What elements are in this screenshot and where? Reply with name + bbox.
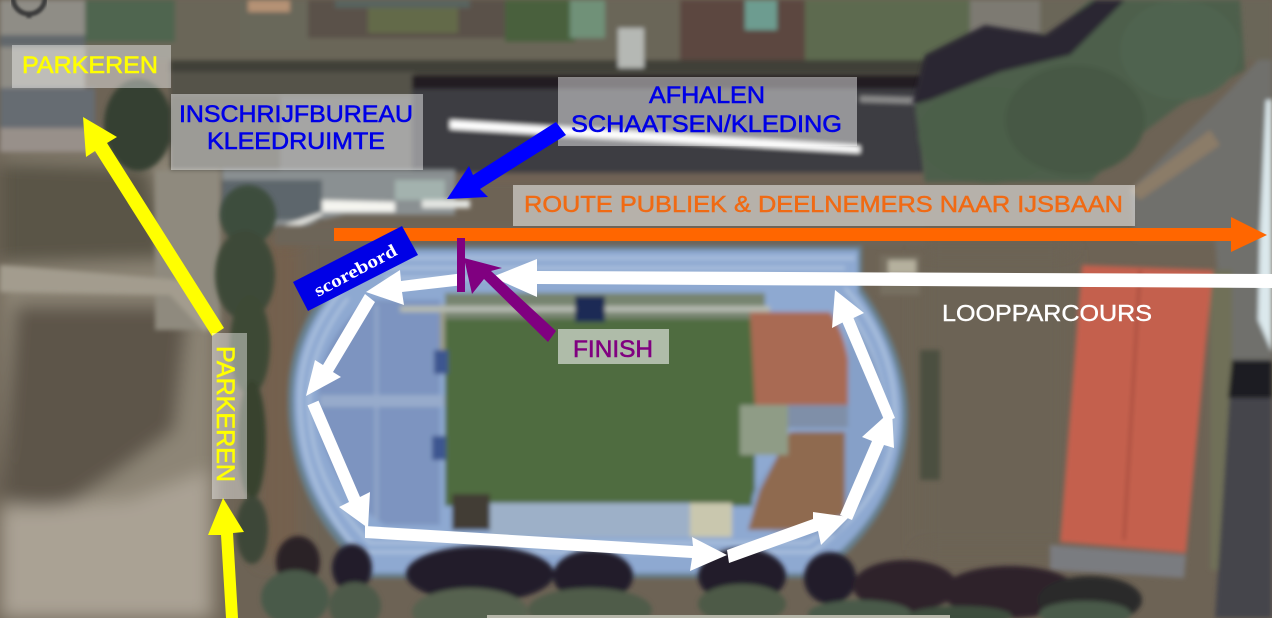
label: finish: [558, 329, 669, 364]
dark roof: [412, 75, 925, 185]
arrow segment 2: [366, 270, 464, 305]
arrow segment 5: [365, 526, 727, 571]
label: registration office and changing room: KLEEDRUIMTE: [207, 128, 385, 155]
arrow segment 7: [840, 410, 894, 520]
label: registration office and changing room: [171, 94, 423, 170]
building by registration office: [222, 170, 455, 232]
top-left parking: [0, 0, 85, 150]
tree shadows: [276, 536, 320, 588]
label: PARKEREN vertical: [211, 333, 247, 499]
ground around track: [275, 225, 925, 245]
tennis-side trees: [920, 350, 940, 480]
label: PARKEREN vertical: PARKEREN: [211, 346, 239, 482]
right road and building: [1130, 60, 1272, 370]
green crowns: [261, 570, 329, 618]
label: public and participants route: ROUTE PUBLIEK & DEELNEMERS NAAR IJSBAAN: [524, 191, 1123, 217]
label: collect skates and clothing: AFHALEN: [649, 82, 765, 109]
label: registration office and changing room: INSCHRIJFBUREAU: [179, 101, 413, 128]
route: orange arrow to ice rink: [334, 217, 1267, 252]
label: PARKEREN top: [12, 45, 171, 88]
scorebord label: [293, 226, 418, 311]
arrow segment 4: [308, 401, 370, 528]
arrow segment 3: [306, 294, 375, 396]
arrow segment 6: [727, 512, 849, 563]
red court: [1060, 265, 1213, 553]
blue arrow to pick-up point: [447, 122, 566, 199]
scorebord label: scorebord: [310, 240, 400, 301]
arrow segment 8: [832, 290, 895, 422]
label: finish: FINISH: [573, 336, 653, 363]
label: collect skates and clothing: SCHAATSEN/KLEDING: [571, 111, 842, 138]
purple arrow to finish: [464, 258, 556, 342]
label: public and participants route: [513, 185, 1135, 226]
label: collect skates and clothing: [558, 77, 857, 146]
finish line marker: [457, 238, 465, 292]
running route: white arrows: [306, 259, 1272, 571]
top right woods: [915, 0, 1245, 182]
left tree line: [220, 185, 276, 245]
label: PARKEREN top: PARKEREN: [22, 52, 158, 79]
infield: [318, 300, 440, 525]
pale strip at bottom edge: [487, 615, 950, 618]
arrow segment 1: [492, 259, 1272, 297]
yellow arrow to top parking: [83, 117, 224, 336]
label: running course: LOOPPARCOURS: [942, 300, 1152, 326]
track: [288, 246, 908, 578]
top strip: [0, 0, 1272, 60]
yellow arrow from the south: [208, 498, 244, 618]
compass control fragment: [13, 0, 45, 18]
